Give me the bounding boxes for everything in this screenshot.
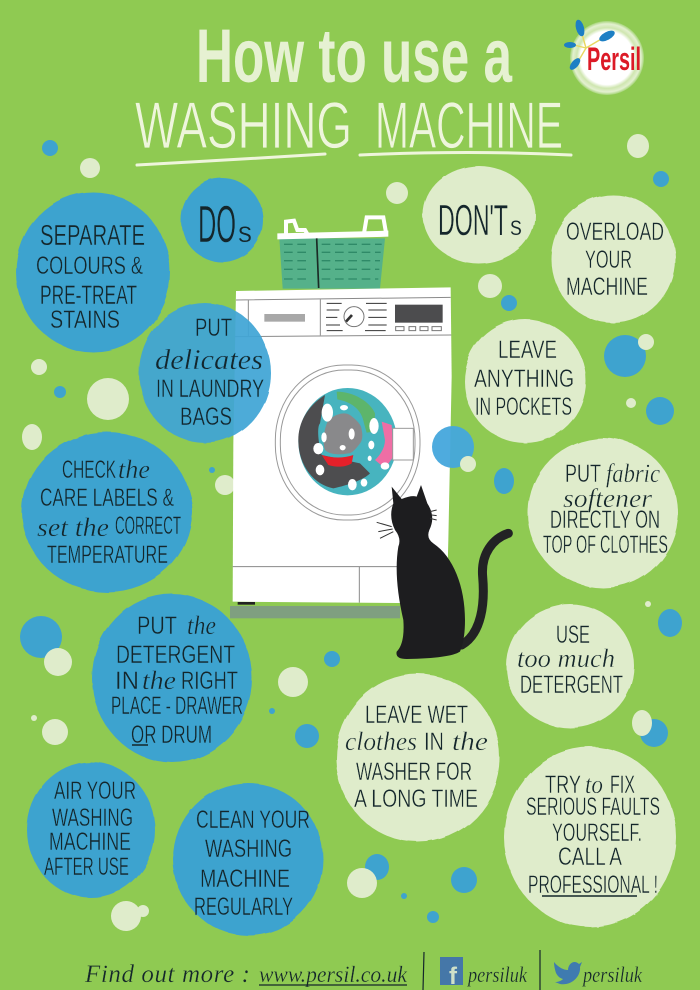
bubble: separate colours: SEPARATE (40, 220, 145, 252)
cat (377, 485, 508, 659)
bubble: clean regularly (173, 783, 323, 935)
title line: How to use a: How to use a (196, 14, 512, 99)
bubble: try to fix faults: YOURSELF. (552, 819, 642, 847)
bubble: air your machine: WASHING (52, 804, 133, 832)
bubble: check care labels: CARE LABELS & (40, 484, 174, 512)
bubble: leave anything in pockets (464, 319, 586, 443)
buttons (396, 327, 441, 331)
Persil logo (564, 19, 644, 95)
drum contents (298, 388, 413, 495)
bubble: air your machine (27, 762, 155, 898)
bubble: DOs heading: DO (198, 196, 236, 254)
find out more: Find out more : (84, 961, 250, 988)
bubble: fabric softener: fabric (606, 459, 660, 488)
bubble: leave wet clothes: LEAVE WET (365, 701, 468, 729)
twitter handle: persiluk (581, 962, 643, 987)
bubble: leave wet clothes (336, 674, 500, 842)
title (135, 14, 571, 165)
machine panel lines (233, 297, 451, 603)
bubble: put delicates in laundry bags: PUT (195, 314, 232, 342)
bubble: clean regularly: WASHING (205, 835, 292, 863)
bubble: put delicates in laundry bags (139, 303, 271, 443)
website: www.persil.co.uk (259, 962, 408, 987)
dial (344, 307, 364, 327)
bubble: put delicates in laundry bags: delicates (155, 345, 263, 376)
title word: Washing: WASHING (135, 88, 352, 162)
bubble: too much detergent: too much (517, 644, 615, 673)
machine body (233, 287, 452, 603)
bubble: check care labels: the (118, 455, 150, 484)
bubble: put the detergent: PLACE - DRAWER (111, 692, 243, 720)
display (395, 305, 443, 323)
bubble: fabric softener: PUT (565, 460, 601, 488)
bubble: too much detergent: DETERGENT (520, 671, 623, 699)
bubble: put the detergent: IN (115, 667, 139, 695)
bubble: overload (551, 195, 675, 323)
bubble: put the detergent: DETERGENT (116, 641, 235, 669)
bubble: too much detergent: USE (556, 621, 590, 649)
footer (84, 950, 643, 990)
overlapping bubbles on machine edge (432, 426, 476, 472)
bubble: leave anything in pockets: LEAVE (498, 336, 557, 364)
bubble: separate colours: STAINS (50, 306, 120, 334)
bubble: overload: MACHINE (566, 273, 648, 301)
facebook icon: f (449, 963, 458, 990)
bubble: try to fix faults (504, 747, 676, 927)
bubble: put the detergent: RIGHT (181, 667, 238, 695)
bubble: check care labels: TEMPERATURE (47, 541, 168, 569)
bubble: DOs heading: s (238, 216, 252, 249)
washing machine illustration (230, 217, 508, 659)
bubble: put the detergent: the (187, 611, 216, 640)
bubble: fabric softener: softener (563, 484, 653, 513)
Persil logo: Persil (587, 41, 641, 77)
bubble: try to fix faults: FIX (610, 771, 635, 799)
bubble: check care labels: CORRECT (115, 512, 181, 540)
bubble: leave wet clothes: WASHER FOR (356, 758, 472, 786)
bubble: leave wet clothes: IN (424, 728, 444, 756)
bubble: separate colours (16, 192, 170, 352)
bubble: put the detergent: the (142, 666, 176, 695)
twitter icon (554, 962, 582, 984)
bubble: try to fix faults: TRY (545, 771, 581, 799)
bubble: air your machine: MACHINE (49, 828, 131, 856)
bubble: air your machine: AIR YOUR (54, 777, 136, 805)
facebook handle: persiluk (466, 962, 528, 987)
bubble: leave wet clothes: clothes (345, 727, 417, 756)
bubble: put delicates in laundry bags: BAGS (180, 403, 232, 431)
bubble: too much detergent (506, 604, 634, 728)
floor shadow (230, 606, 400, 618)
bubble: put the detergent (92, 594, 252, 762)
bubble: leave wet clothes: A LONG TIME (354, 785, 478, 813)
facebook icon (440, 957, 463, 990)
bubble: clean regularly: MACHINE (200, 865, 290, 893)
detergent drawer handle (264, 314, 305, 322)
bubble: DON'Ts heading: s (510, 210, 522, 241)
bubble: clean regularly: CLEAN YOUR (196, 806, 310, 834)
bubble: put the detergent: PUT (137, 612, 177, 640)
bubble: check care labels: set the (37, 513, 109, 542)
bubble: check care labels: CHECK (62, 456, 116, 484)
title word: Machine: MACHINE (375, 88, 563, 162)
bubble: air your machine: AFTER USE (44, 853, 129, 881)
bubble: try to fix faults: CALL A (558, 843, 622, 871)
bubble: check care labels (22, 432, 192, 592)
bubble: put delicates in laundry bags: IN LAUNDRY (156, 375, 264, 403)
bubble: put the detergent: OR DRUM (131, 721, 212, 749)
bubble: overload: YOUR (585, 246, 632, 274)
bubble: separate colours: COLOURS & (36, 252, 143, 280)
door rings (275, 365, 420, 520)
bubble: leave anything in pockets: ANYTHING (474, 365, 574, 393)
machine foot (238, 602, 255, 605)
bubble: leave anything in pockets: IN POCKETS (475, 393, 572, 421)
bubble: try to fix faults: to (585, 770, 603, 799)
laundry basket (277, 217, 388, 289)
bubble: DON'Ts heading (423, 166, 535, 264)
small decorative bubbles (20, 134, 682, 931)
bubble: separate colours: PRE-TREAT (40, 280, 137, 310)
bubble: DOs heading (181, 178, 263, 262)
bubble: leave wet clothes: the (452, 727, 488, 756)
bubble: clean regularly: REGULARLY (194, 893, 293, 921)
bubble: DON'Ts heading: DON'T (438, 196, 508, 245)
bubble: fabric softener (528, 438, 678, 588)
